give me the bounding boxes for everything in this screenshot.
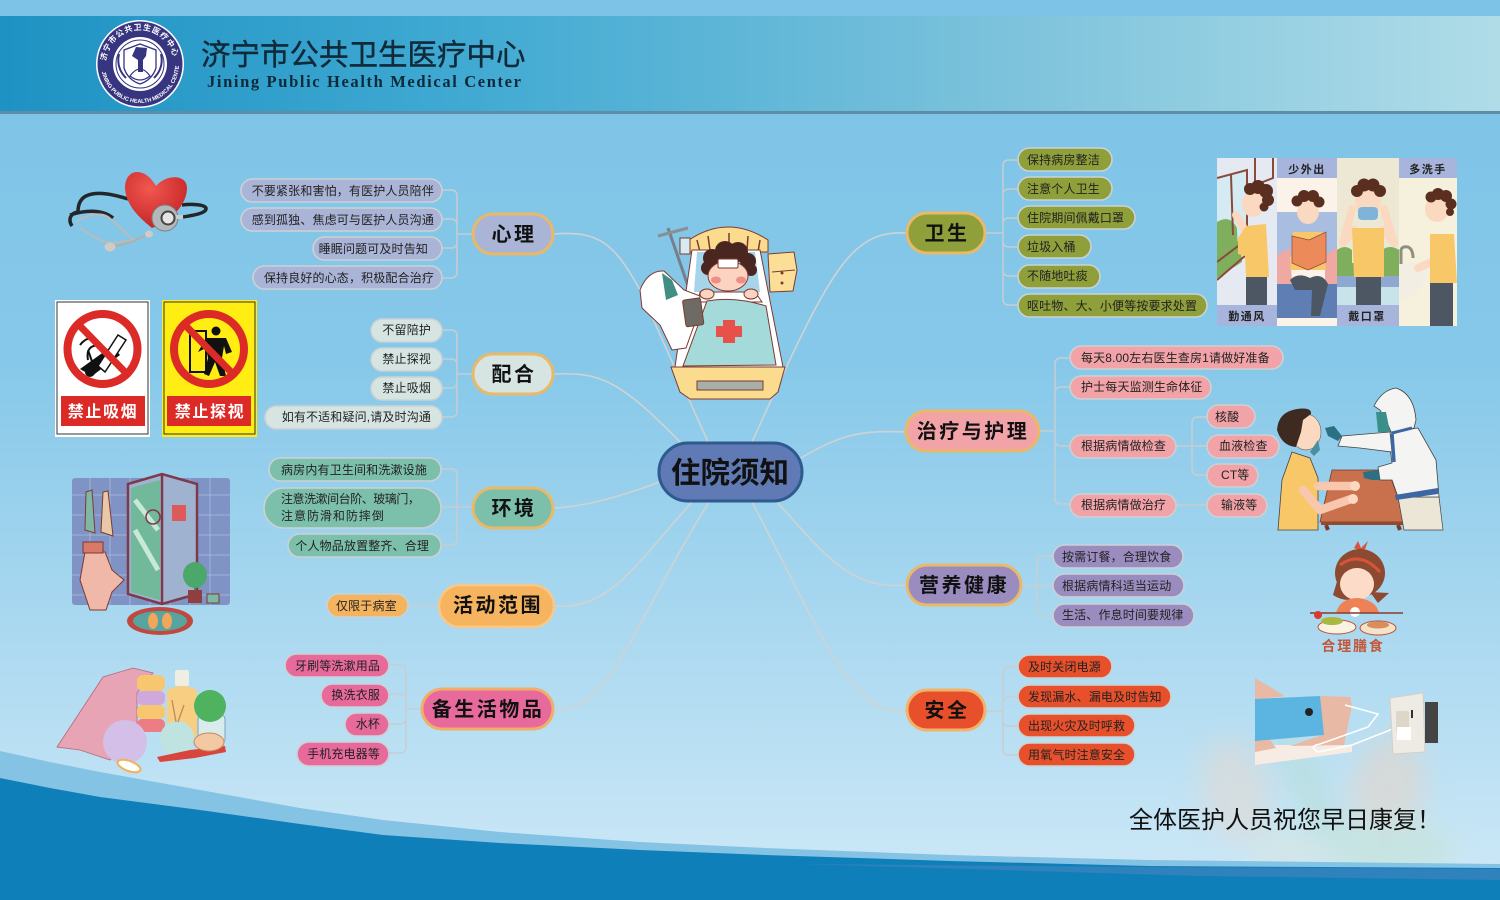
leaf: 注意防滑和防摔倒	[281, 508, 384, 523]
branch: 治疗与护理	[906, 346, 1283, 517]
leaf: 保持病房整洁	[1027, 152, 1100, 167]
leaf: 住院期间佩戴口罩	[1027, 210, 1124, 225]
root node	[659, 443, 802, 501]
topic	[473, 488, 553, 528]
sign: no visiting	[162, 300, 257, 437]
topic	[422, 689, 553, 729]
leaf	[288, 534, 441, 557]
leaf	[1053, 545, 1183, 568]
leaf: 出现火灾及时呼救	[1028, 718, 1125, 733]
topic: 配合	[492, 363, 536, 386]
leaf: 核酸	[1215, 409, 1239, 424]
panel: 戴口罩: 戴口罩	[1348, 309, 1386, 323]
leaf: 手机充电器等	[307, 746, 380, 761]
topic	[906, 411, 1039, 451]
leaf: 用氧气时注意安全	[1028, 747, 1125, 762]
sign: no smoking: 禁止吸烟	[68, 403, 138, 421]
panel: 勤通风	[1217, 158, 1277, 326]
decorative faded flower	[1191, 721, 1455, 880]
leaf	[345, 713, 389, 736]
leaf: 病房内有卫生间和洗漱设施	[281, 462, 427, 477]
leaf	[321, 684, 389, 707]
panel: 少外出: 少外出	[1288, 162, 1326, 176]
leaf	[1070, 346, 1283, 369]
bottom wave highlight	[800, 864, 1500, 880]
illustration: nurse swabbing patient	[1277, 388, 1443, 530]
illustration: hygiene four panels	[1217, 158, 1457, 326]
leaf	[264, 488, 441, 528]
leaf: 水杯	[356, 717, 380, 731]
bottom wave: dark band	[0, 778, 1500, 900]
illustration: toiletries	[57, 668, 226, 775]
leaf	[1207, 405, 1255, 428]
leaf	[371, 319, 442, 342]
leaf: 根据病情做检查	[1081, 438, 1166, 453]
leaf	[371, 348, 442, 371]
leaf	[1018, 265, 1100, 288]
leaf: 按需订餐，合理饮食	[1062, 549, 1171, 564]
leaf	[1053, 604, 1194, 627]
leaf: 根据病情科适当运动	[1062, 578, 1171, 593]
leaf: 不要紧张和害怕，有医护人员陪伴	[252, 183, 434, 198]
bottom wave: light band	[0, 751, 1500, 900]
leaf	[297, 742, 389, 766]
branch: 活动范围	[327, 585, 554, 627]
sign: no visiting: 禁止探视	[175, 403, 245, 421]
illustration: girl eating	[1310, 541, 1403, 654]
topic: 心理	[492, 223, 536, 246]
illustration: bathroom	[72, 474, 230, 635]
branch: 环境	[264, 458, 553, 557]
branch: 配合	[265, 319, 553, 429]
hospital logo: 济宁市公共卫生医疗中心	[100, 24, 178, 61]
leaf: 不随地吐痰	[1027, 268, 1088, 283]
leaf	[1018, 294, 1207, 317]
leaf: 每天8.00左右医生查房1请做好准备	[1081, 350, 1270, 365]
panel: 多洗手	[1399, 158, 1457, 326]
leaf	[1207, 435, 1279, 458]
caption: 合理膳食	[1321, 638, 1385, 654]
leaf: 牙刷等洗漱用品	[295, 659, 380, 673]
leaf	[1053, 574, 1184, 597]
leaf: 保持良好的心态，积极配合治疗	[264, 270, 434, 285]
sign: no smoking	[55, 300, 150, 437]
leaf: 注意个人卫生	[1027, 181, 1100, 196]
panel: 戴口罩	[1337, 158, 1399, 326]
leaf: 及时关闭电源	[1028, 660, 1101, 674]
leaf: 仅限于病室	[336, 598, 397, 613]
leaf	[1207, 464, 1258, 487]
closing message: 全体医护人员祝您早日康复！	[1129, 807, 1441, 834]
leaf: 如有不适和疑问,请及时沟通	[282, 409, 431, 424]
leaf: 换洗衣服	[331, 687, 380, 702]
leaf	[1207, 494, 1267, 517]
leaf	[269, 458, 441, 481]
topic	[439, 585, 554, 627]
leaf: 根据病情做治疗	[1081, 497, 1166, 512]
leaf: 感到孤独、焦虑可与医护人员沟通	[252, 212, 434, 227]
panel: 多洗手: 多洗手	[1409, 162, 1447, 176]
topic: 治疗与护理	[917, 420, 1029, 443]
leaf: CT等	[1221, 468, 1249, 482]
leaf	[1018, 714, 1135, 737]
leaf	[1018, 743, 1135, 766]
leaf: 输液等	[1221, 497, 1257, 512]
leaf	[1018, 177, 1112, 200]
leaf	[1018, 235, 1091, 258]
leaf: 禁止吸烟	[382, 381, 431, 395]
branch: 卫生	[907, 148, 1207, 317]
leaf: 发现漏水、漏电及时告知	[1028, 689, 1162, 704]
topic	[473, 354, 553, 394]
illustration: heart and stethoscope	[70, 172, 206, 252]
panel: 勤通风: 勤通风	[1228, 309, 1266, 323]
leaf	[285, 654, 389, 677]
leaf	[371, 377, 442, 400]
leaf	[1018, 206, 1135, 229]
leaf	[313, 237, 442, 260]
topic	[473, 214, 553, 254]
leaf: 垃圾入桶	[1027, 239, 1076, 254]
leaf	[1070, 435, 1176, 458]
illustration: bed with patient and nurse	[640, 227, 797, 399]
leaf: 睡眠问题可及时告知	[319, 242, 428, 256]
branch: 营养健康	[907, 545, 1194, 627]
leaf: 生活、作息时间要规律	[1062, 607, 1184, 622]
leaf: 呕吐物、大、小便等按要求处置	[1027, 299, 1197, 313]
root node: 住院须知	[671, 457, 789, 490]
topic: 备生活物品	[432, 698, 544, 721]
branch: 备生活物品	[285, 654, 553, 766]
leaf	[327, 594, 408, 617]
leaf	[1018, 655, 1112, 678]
leaf	[1018, 148, 1112, 171]
leaf	[241, 208, 442, 231]
panel: 少外出	[1277, 158, 1337, 326]
topic	[907, 213, 985, 253]
leaf	[1070, 376, 1211, 399]
main connectors from root	[554, 233, 906, 711]
topic: 环境	[492, 496, 536, 520]
leaf	[241, 179, 442, 202]
topic: 安全	[924, 698, 970, 722]
topic	[907, 690, 985, 730]
branch: 心理	[241, 179, 553, 289]
topic: 卫生	[924, 222, 970, 245]
leaf: 注意洗漱间台阶、玻璃门，	[281, 491, 420, 506]
leaf: 个人物品放置整齐、合理	[295, 538, 429, 553]
leaf	[1070, 494, 1176, 517]
header band	[0, 16, 1500, 114]
branch: 安全	[907, 655, 1171, 766]
title: Chinese: 济宁市公共卫生医疗中心	[201, 39, 526, 72]
leaf: 护士每天监测生命体征	[1081, 379, 1203, 394]
leaf	[265, 406, 442, 429]
leaf: 血液检查	[1219, 438, 1268, 453]
topic: 营养健康	[919, 573, 1009, 597]
topic	[907, 565, 1021, 605]
leaf	[253, 266, 442, 289]
hospital logo	[96, 20, 184, 108]
leaf: 禁止探视	[382, 351, 431, 366]
title: English: Jining Public Health Medical Center	[207, 72, 523, 91]
topic: 活动范围	[453, 594, 543, 617]
leaf	[1018, 685, 1171, 708]
illustration: phone charging	[1255, 678, 1438, 765]
leaf: 不留陪护	[382, 322, 431, 337]
